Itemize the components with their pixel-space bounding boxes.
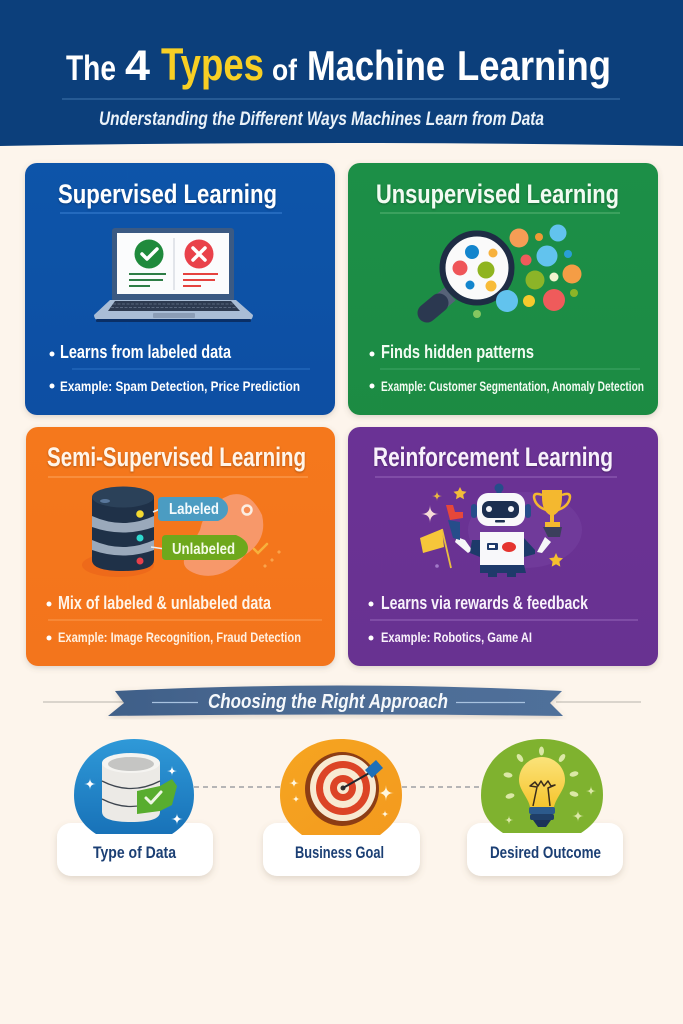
label: Labeled <box>158 497 228 521</box>
icon: light bulb <box>481 739 603 833</box>
subtitle: Understanding the Different Ways Machines Learn from Data <box>99 109 544 130</box>
label card <box>263 823 420 876</box>
bullet: example: Example: Spam Detection, Price Prediction <box>60 378 300 394</box>
icon: magnifier with data clusters <box>427 224 582 318</box>
heading: Unsupervised Learning <box>376 179 619 209</box>
label card: Type of Data <box>93 844 177 862</box>
title: of <box>272 54 298 87</box>
title: Machine <box>307 42 445 89</box>
label card <box>57 823 213 876</box>
bullet: description: Learns via rewards & feedback <box>381 593 589 613</box>
label card <box>467 823 623 876</box>
icon: database with check <box>74 739 194 834</box>
bullet: example: Example: Robotics, Game AI <box>381 629 532 645</box>
bullet: example: Example: Image Recognition, Fraud Detection <box>58 629 301 645</box>
label card: Desired Outcome <box>490 844 601 862</box>
heading: Supervised Learning <box>58 179 277 209</box>
item: type of data <box>57 739 213 876</box>
panel: semi-supervised learning <box>26 427 335 666</box>
label: Unlabeled <box>162 535 248 560</box>
panel: supervised learning <box>25 163 335 415</box>
icon: database with labeled and unlabeled tags <box>82 486 281 577</box>
label card: Business Goal <box>295 844 384 862</box>
heading: Reinforcement Learning <box>373 442 613 472</box>
label: Labeled: Labeled <box>169 501 219 518</box>
icon: laptop with check and cross <box>94 228 253 322</box>
bullet: description: Learns from labeled data <box>60 342 232 362</box>
icon: robot with trophy and flag <box>420 484 582 577</box>
bullet: description: Finds hidden patterns <box>381 342 534 362</box>
header band <box>0 0 683 146</box>
title <box>66 39 611 90</box>
panel: unsupervised learning <box>348 163 658 415</box>
title: 4 <box>125 42 150 90</box>
title: Learning <box>457 42 611 89</box>
label: Unlabeled: Unlabeled <box>172 541 235 558</box>
section banner: choosing the right approach <box>108 686 563 716</box>
item: desired outcome <box>467 739 623 876</box>
bullet: description: Mix of labeled & unlabeled data <box>58 593 272 613</box>
title: The <box>66 49 116 88</box>
section banner: choosing the right approach: Choosing the Right Approach <box>208 691 448 713</box>
heading: Semi-Supervised Learning <box>47 442 306 472</box>
title: Types <box>161 39 264 90</box>
icon: target with arrow <box>280 739 402 835</box>
item: business goal <box>263 739 420 876</box>
panel: reinforcement learning <box>348 427 658 666</box>
